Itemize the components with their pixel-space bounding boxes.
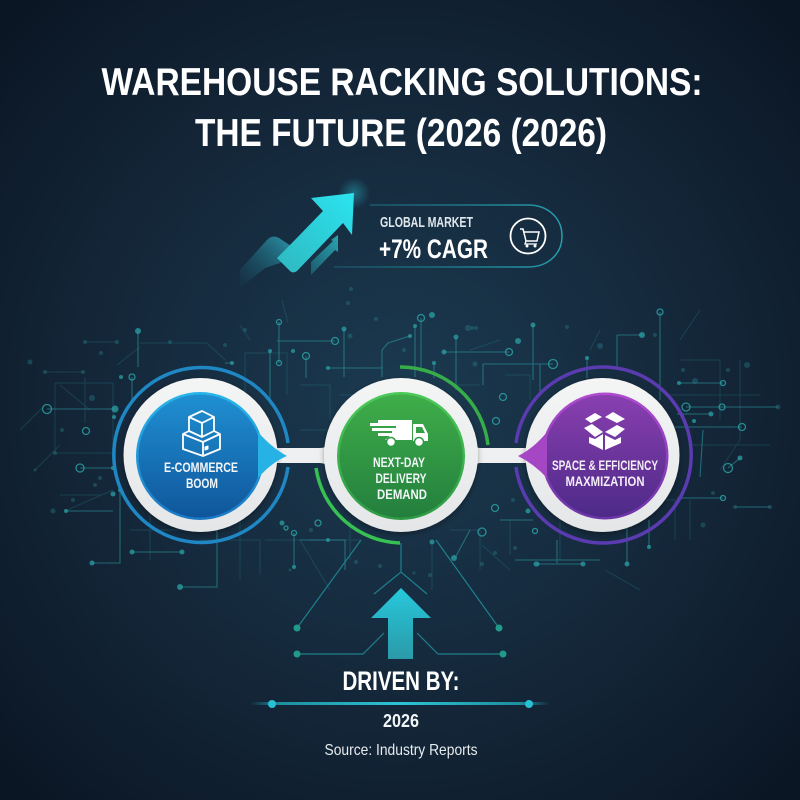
label: NEXT-DAY bbox=[373, 454, 425, 470]
label: SPACE & EFFICIENCY bbox=[552, 457, 658, 473]
title bbox=[102, 61, 702, 155]
node: space and efficiency bbox=[516, 367, 691, 543]
growth arrow bbox=[240, 177, 370, 288]
title: WAREHOUSE RACKING SOLUTIONS: bbox=[102, 61, 702, 104]
up arrow bbox=[371, 588, 431, 659]
label: E-COMMERCE bbox=[164, 459, 238, 475]
source: Source: Industry Reports bbox=[324, 742, 478, 759]
circuit board pattern bbox=[20, 287, 780, 590]
label: global market: GLOBAL MARKET bbox=[380, 215, 473, 231]
driver lines and dots bbox=[294, 540, 506, 658]
node: e-commerce boom bbox=[114, 367, 288, 542]
label: DEMAND bbox=[377, 486, 427, 502]
icon: open box bbox=[584, 412, 625, 450]
label bbox=[164, 459, 238, 491]
label bbox=[373, 454, 427, 502]
driven by heading: DRIVEN BY: bbox=[342, 666, 460, 696]
label bbox=[552, 457, 658, 489]
icon: delivery truck bbox=[370, 420, 428, 446]
white connector bar bbox=[262, 443, 538, 468]
label: MAXMIZATION bbox=[566, 473, 644, 489]
label: DELIVERY bbox=[376, 470, 427, 486]
value: +7% CAGR: +7% CAGR bbox=[379, 234, 488, 264]
year: 2026 bbox=[383, 711, 419, 731]
label: BOOM bbox=[186, 475, 218, 491]
node: next-day delivery bbox=[316, 367, 488, 543]
market callout bbox=[334, 205, 562, 267]
icon: boxes bbox=[183, 411, 220, 456]
icon: shopping cart bbox=[510, 218, 546, 254]
title: THE FUTURE (2026 (2026) bbox=[195, 112, 607, 155]
divider with dots bbox=[250, 700, 550, 708]
